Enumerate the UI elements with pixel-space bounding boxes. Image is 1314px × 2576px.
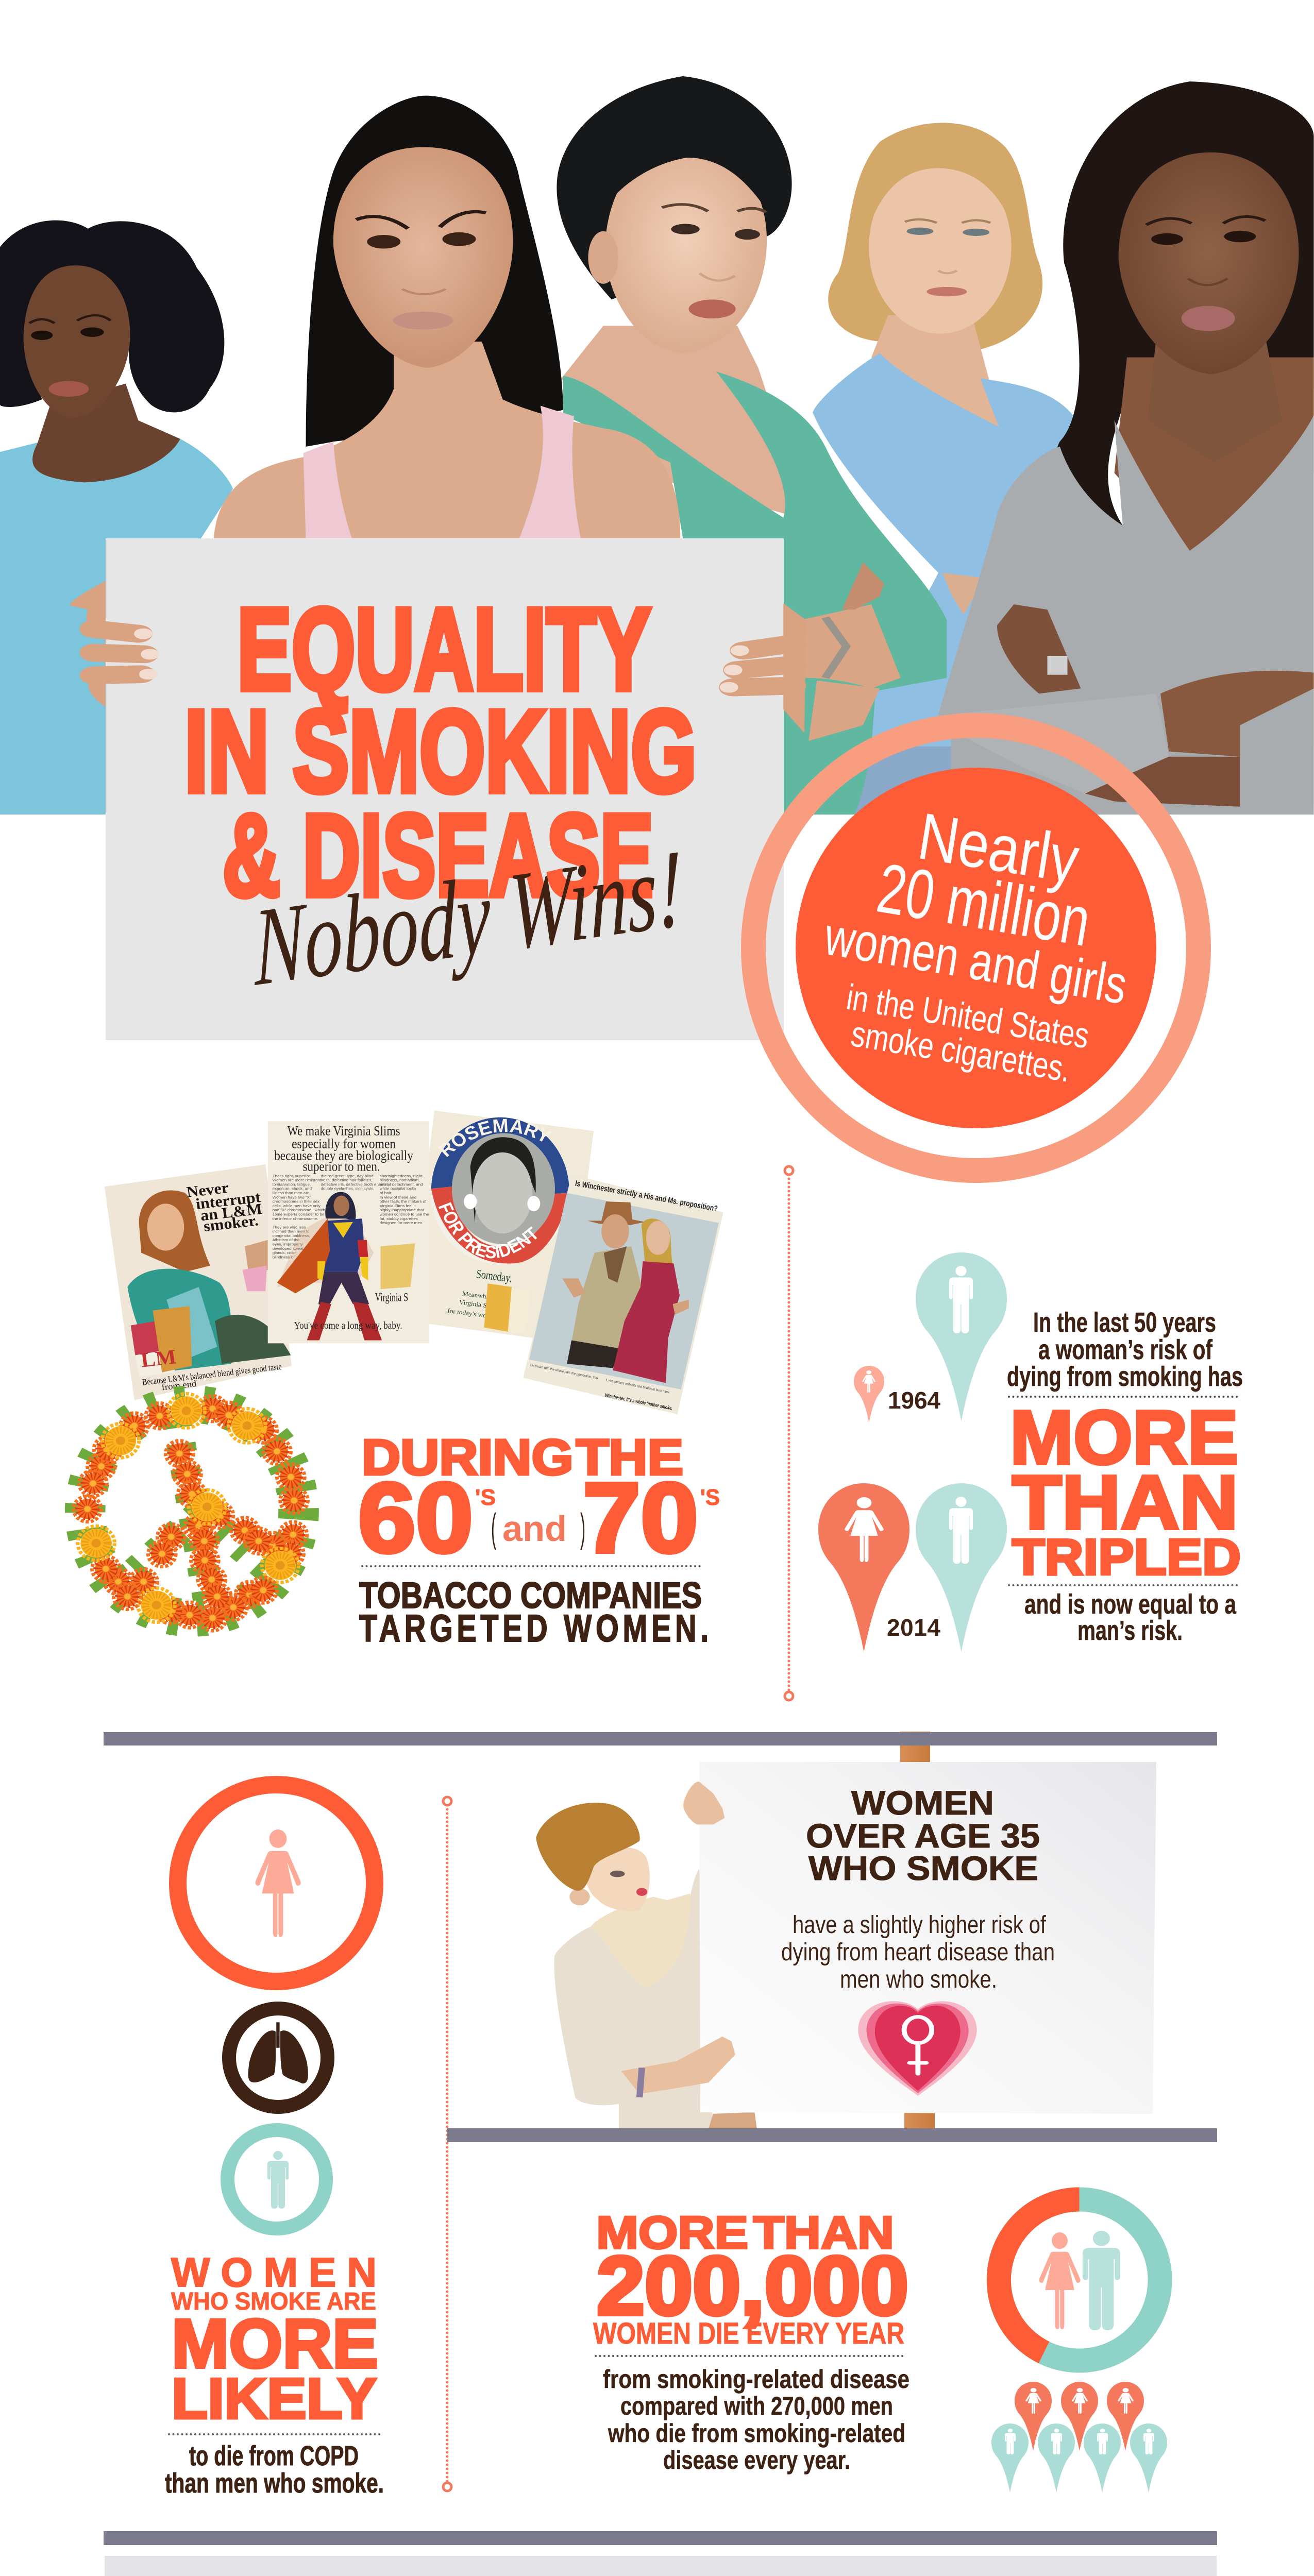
woman 3: dark hair in green sweater [557,76,947,815]
ad: L&M smoker: interrupt [195,1188,262,1213]
ad: We make Virginia Slims: blindness, nomadism, [380,1178,419,1182]
ad: We make Virginia Slims: because they are biologically [274,1148,413,1163]
ad: Virginia Slims button: Virginia Slims. [459,1298,501,1311]
text: risk more than tripled: man’s risk. [1077,1615,1183,1646]
ad: Virginia Slims button: Someday. [475,1268,513,1285]
icon: lungs in dark circle [229,2008,328,2107]
ad: Virginia Slims button: FOR PRESIDENT [439,1202,537,1258]
heading: during the 60s and 70s: DURING THE [362,1429,683,1485]
ad: We make Virginia Slims: illness than men are. [273,1191,311,1195]
pin: woman 1964 [854,1366,884,1422]
board body text: dying from heart disease than [781,1939,1055,1966]
ad: We make Virginia Slims: Virginia Slims feel it [380,1204,416,1208]
subheading: tobacco companies targeted women: TARGETED WOMEN. [359,1607,713,1650]
section bar above quit panel [104,2531,1217,2545]
ad: Virginia Slims button [429,1111,594,1338]
text: women who smoke are more likely: LIKELY [172,2367,377,2431]
ad: We make Virginia Slims: inclined than men to [273,1229,310,1234]
ad: We make Virginia Slims: especially for women [292,1136,396,1151]
ad: We make Virginia Slims: designed for mere men. [380,1221,424,1225]
ad: We make Virginia Slims: developed sweat [273,1246,304,1251]
heading: during the 60s and 70s: 70 [583,1462,698,1573]
text: risk more than tripled: THAN [1012,1460,1238,1545]
divider: vertical dotted line 2 [443,1797,451,2491]
ad: We make Virginia Slims: blindness of [273,1255,295,1259]
text: risk more than tripled: a woman’s risk of [1038,1334,1213,1365]
callout: nearly 20 million: Nearly [914,799,1084,897]
panel: quit smoking [105,2556,1217,2576]
board heading: WOMEN [851,1784,994,1822]
ad: L&M smoker: an L&M [199,1200,263,1224]
text: more than 200,000: WOMEN DIE EVERY YEAR [593,2317,904,2350]
callout: nearly 20 million: 20 million [872,849,1096,961]
heading: during the 60s and 70s: ) [580,1505,585,1550]
board heading [806,1784,1040,1887]
text: women who smoke are more likely: WOMEN [171,2249,377,2295]
ad: We make Virginia Slims: Albinism of the [273,1238,299,1242]
text: more than 200,000: from smoking-related disease [603,2365,909,2394]
ad: L&M smoker: from end [161,1379,197,1392]
heading: during the 60s and 70s: 'S [700,1485,720,1510]
ad: We make Virginia Slims: the inferior chromosome. [273,1216,318,1221]
photo: woman peeking behind board [536,1803,757,2129]
section bar under board [447,2128,1217,2142]
subheading: tobacco companies targeted women [359,1575,713,1650]
callout: nearly 20 million: smoke cigarettes. [849,1013,1074,1090]
donut chart: women vs men deaths [999,2199,1160,2361]
ad: Virginia Slims button: ROSEMARY [438,1119,552,1157]
text: risk more than tripled: TRIPLED [1012,1529,1241,1585]
text: women who smoke are more likely: MORE [172,2306,378,2382]
ad: We make Virginia Slims: one "X" chromosome...which [273,1208,325,1212]
ad: We make Virginia Slims: the red-green type, day blind- [321,1174,375,1178]
heading: during the 60s and 70s: 'S [475,1485,496,1510]
ad: We make Virginia Slims: women continue to use the [379,1212,429,1216]
hands holding sign [70,581,806,733]
handwritten tagline: Nobody Wins! [251,826,684,1009]
ad: We make Virginia Slims: Virginia S [375,1291,408,1304]
ad: We make Virginia Slims: ness, defective hair follicles, [321,1178,372,1182]
panel: woman holding board [536,1762,1156,2142]
ad: We make Virginia Slims [268,1121,429,1343]
text: risk more than tripled: In the last 50 years [1033,1307,1216,1338]
hero photo: five women [0,76,1314,815]
sign headline: IN SMOKING [184,686,697,816]
ad: We make Virginia Slims: You've come a long way, baby. [294,1320,402,1331]
board body text: have a slightly higher risk of [793,1911,1047,1939]
ad: L&M smoker: smoker. [203,1211,259,1235]
heading: during the 60s and 70s: and [502,1509,567,1549]
pin: woman 2014 [818,1483,909,1652]
ad: We make Virginia Slims: eyes, improperly [273,1242,303,1246]
board body text: men who smoke. [840,1966,997,1993]
ad: We make Virginia Slims: chromosomes in their sex [273,1199,319,1204]
sign headline [184,584,697,920]
icon: heart with female symbol [858,2001,977,2096]
callout: nearly 20 million: women and girls [820,906,1131,1015]
text: risk more than tripled: and is now equal to a [1024,1589,1237,1620]
text: women who smoke are more likely [165,2249,384,2499]
ad: We make Virginia Slims: We make Virginia Slims [288,1123,400,1138]
ad: We make Virginia Slims: shortsightedness, night- [380,1174,424,1178]
ad: We make Virginia Slims: Women are more resistant [273,1178,322,1182]
board [699,1762,1156,2114]
icon: flower peace sign [74,1394,308,1631]
pins: 1964 vs 2014 risk [818,1252,1007,1652]
ad: L&M smoker [105,1164,292,1400]
text: more than 200,000: MORE THAN [596,2207,894,2258]
hands on board [621,1782,735,2097]
board heading: OVER AGE 35 [806,1817,1040,1855]
ad: We make Virginia Slims: fat, stubby cigarettes [380,1216,418,1221]
subheading: tobacco companies targeted women: TOBACCO COMPANIES [359,1575,702,1616]
ad: We make Virginia Slims: defective iris, defective tooth enamel, [321,1182,389,1187]
heading: during the 60s and 70s: ( [491,1505,496,1550]
sign headline: & DISEASE [223,790,653,920]
ad: We make Virginia Slims: retinal detachment, and [380,1182,423,1187]
text: women who smoke are more likely: to die from COPD [189,2441,359,2471]
text: more than 200,000: disease every year. [663,2446,850,2475]
ad: We make Virginia Slims: double eyelashes, skin cysts. [321,1187,374,1191]
ad: We make Virginia Slims: some experts consider to be [273,1212,325,1216]
ad: We make Virginia Slims: exposure, shock, and [273,1187,312,1191]
ad: We make Virginia Slims: glands, color [273,1250,296,1255]
divider: vertical dotted line 1 [785,1166,793,1700]
icon: woman in orange circle [178,1785,375,1981]
callout: nearly 20 million [753,725,1199,1171]
year 2014: 2014 [887,1614,940,1641]
ad: We make Virginia Slims: That's right, superior. [273,1174,311,1178]
post: wood post top [900,1732,930,1762]
ad: We make Virginia Slims: highly inappropriate that [380,1208,424,1212]
ad: Virginia Slims button: Meanwhile [462,1290,494,1301]
ad: We make Virginia Slims: cells, while men have only [273,1204,321,1208]
text: more than 200,000: who die from smoking-related [608,2419,905,2448]
text: risk more than tripled [1007,1307,1243,1646]
text: more than 200,000 [593,2207,909,2475]
pin: man 1964 [916,1252,1007,1421]
ad: We make Virginia Slims: They are also less [273,1225,306,1229]
ad: Winchester: Winchester. It's a whole 'nother smoke. [604,1393,673,1412]
ad: Virginia Slims button: for today's woman. [447,1307,500,1321]
woman 4: blonde in blue [813,123,1081,815]
ad: Winchester: Let's start with the simple part: the proposition. You [530,1364,598,1380]
ad: We make Virginia Slims: congenital baldness, [273,1233,310,1238]
icon: man in teal circle [228,2130,326,2229]
board heading: WHO SMOKE [808,1849,1038,1887]
sign headline: EQUALITY [237,584,651,714]
ad: L&M smoker: Because L&M's balanced blend gives good taste [142,1361,282,1387]
text: more than 200,000: compared with 270,000 men [620,2392,893,2420]
text: risk more than tripled: MORE [1010,1395,1238,1480]
ad: We make Virginia Slims: Women have two "X" [273,1195,311,1199]
woman 2: long black hair holding sign [214,96,680,538]
post: wood post bottom [904,2112,935,2142]
ad: We make Virginia Slims: In view of these and [380,1195,416,1199]
ad: L&M smoker: Never [186,1179,230,1201]
pin: man 2014 [916,1483,1007,1652]
board body text [781,1911,1055,1993]
ad: We make Virginia Slims: to starvation, fatigue, [273,1182,311,1187]
ad: Winchester [523,1175,723,1414]
woman 5: black hair in grey cardigan [938,81,1314,815]
pictogram: 3 women pins and 4 men pins [991,2382,1167,2493]
ad: We make Virginia Slims: of hair. [380,1191,392,1195]
ad: Winchester: Is Winchester strictly a His and Ms. proposition? [575,1179,718,1213]
ad: We make Virginia Slims: white occipital locks [379,1187,416,1191]
ad: L&M smoker: LM [139,1345,178,1371]
heading: during the 60s and 70s: 60 [358,1462,473,1573]
text: more than 200,000: 200,000 [597,2240,908,2332]
year 1964: 1964 [888,1387,940,1414]
heading: during the 60s and 70s [358,1429,720,1573]
sign board [106,538,784,1040]
ad: Winchester: Even women, with bits and bridles to burn must [606,1379,669,1394]
text: women who smoke are more likely: than men who smoke. [165,2468,384,2499]
vintage tobacco ads collage [104,1111,723,1414]
ad: We make Virginia Slims: other facts, the makers of [380,1199,427,1204]
woman 1: natural hair in light blue tee [0,221,233,815]
callout: nearly 20 million: in the United States [844,977,1092,1056]
ad: We make Virginia Slims: superior to men. [303,1158,380,1174]
text: women who smoke are more likely: WHO SMOKE ARE [171,2288,376,2315]
